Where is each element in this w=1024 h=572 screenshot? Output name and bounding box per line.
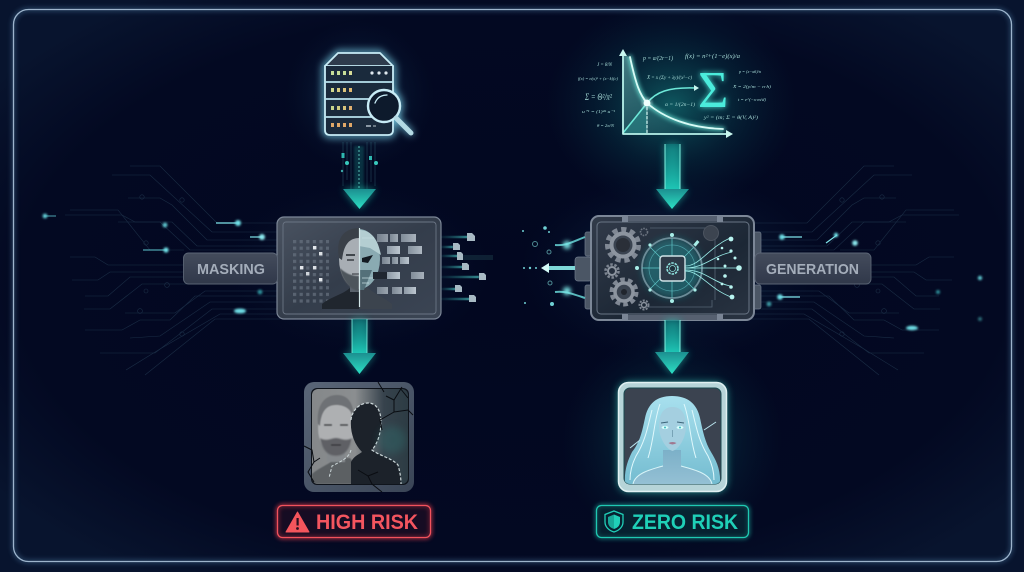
arrow: generation to output xyxy=(655,320,689,374)
hair back xyxy=(625,396,720,484)
pixel blocks xyxy=(373,234,424,294)
label: generation: GENERATION xyxy=(766,261,859,278)
dot matrix xyxy=(293,240,329,303)
formulas: X̄ = 2(y/m − n·h) xyxy=(732,84,772,89)
icon: shield xyxy=(605,511,623,532)
sigma: Σ xyxy=(698,62,728,119)
label: generation xyxy=(755,253,871,284)
arrow: masking to output xyxy=(343,319,376,374)
panel: masking xyxy=(277,217,441,319)
light pulses: left xyxy=(43,214,265,313)
formulas: f(x) = n(x)² + (x−k)(c) xyxy=(578,77,619,81)
microchip xyxy=(660,256,685,281)
panel: generation xyxy=(575,216,761,320)
formulas: Σ = Θ²/π² xyxy=(584,92,612,102)
circuit traces: right xyxy=(744,166,959,375)
label: masking xyxy=(184,253,278,284)
formulas xyxy=(578,53,772,128)
label: masking: MASKING xyxy=(197,261,265,278)
formulas: α = 1/(2n−1) xyxy=(665,101,695,108)
neural fan-out xyxy=(685,237,742,299)
silhouette xyxy=(329,403,401,484)
icon: database server with magnifier xyxy=(325,53,411,135)
badge: high risk: HIGH RISK xyxy=(316,511,418,534)
server status lights xyxy=(331,71,388,127)
formulas: θ = 2π/N xyxy=(597,123,614,128)
chart curves xyxy=(623,52,731,134)
gears xyxy=(606,226,718,310)
arrow: server to masking xyxy=(341,142,378,209)
shoulders and neck xyxy=(633,450,712,484)
face xyxy=(659,407,686,451)
formulas: u⁺¹ = (1)²ⁿ u⁻¹ xyxy=(582,109,616,114)
card: cracked masked portrait xyxy=(304,382,414,492)
arrow: chart to generation xyxy=(656,144,689,209)
icon: warning triangle xyxy=(286,512,309,532)
badge: high risk xyxy=(278,506,430,538)
card: synthetic portrait xyxy=(618,382,727,492)
circuit traces: left xyxy=(65,166,280,375)
formulas: f(x) = n²+(1−e)(x)/a xyxy=(685,53,740,60)
light pulses: right xyxy=(767,233,982,330)
side connectors xyxy=(575,232,761,309)
icon: formula chart xyxy=(578,49,772,138)
formulas: p = (x−αk)/n xyxy=(738,69,762,74)
formulas: p = a/(2r−1) xyxy=(642,55,673,62)
formulas: X̄ = x (Σy + λy)/(x²−c) xyxy=(646,75,692,81)
data streams leaving masking panel xyxy=(441,233,493,302)
chart shaded area xyxy=(623,55,723,134)
split face: robotic half xyxy=(360,229,381,290)
chip halo and rings xyxy=(642,238,702,298)
formulas: t = e^(−x·m/d) xyxy=(738,97,767,102)
ambient teal glow: right column xyxy=(229,0,822,550)
cracks xyxy=(304,382,413,492)
man xyxy=(312,394,354,484)
badge: zero risk: ZERO RISK xyxy=(632,511,738,534)
magnifier xyxy=(368,90,411,133)
formulas: J = 8/N xyxy=(597,63,613,68)
badge: zero risk xyxy=(596,506,748,538)
formulas: y² = (m; Σ = θ(V, A)²) xyxy=(703,114,758,121)
split face: human half xyxy=(322,228,359,309)
input streams: generation xyxy=(522,226,585,306)
